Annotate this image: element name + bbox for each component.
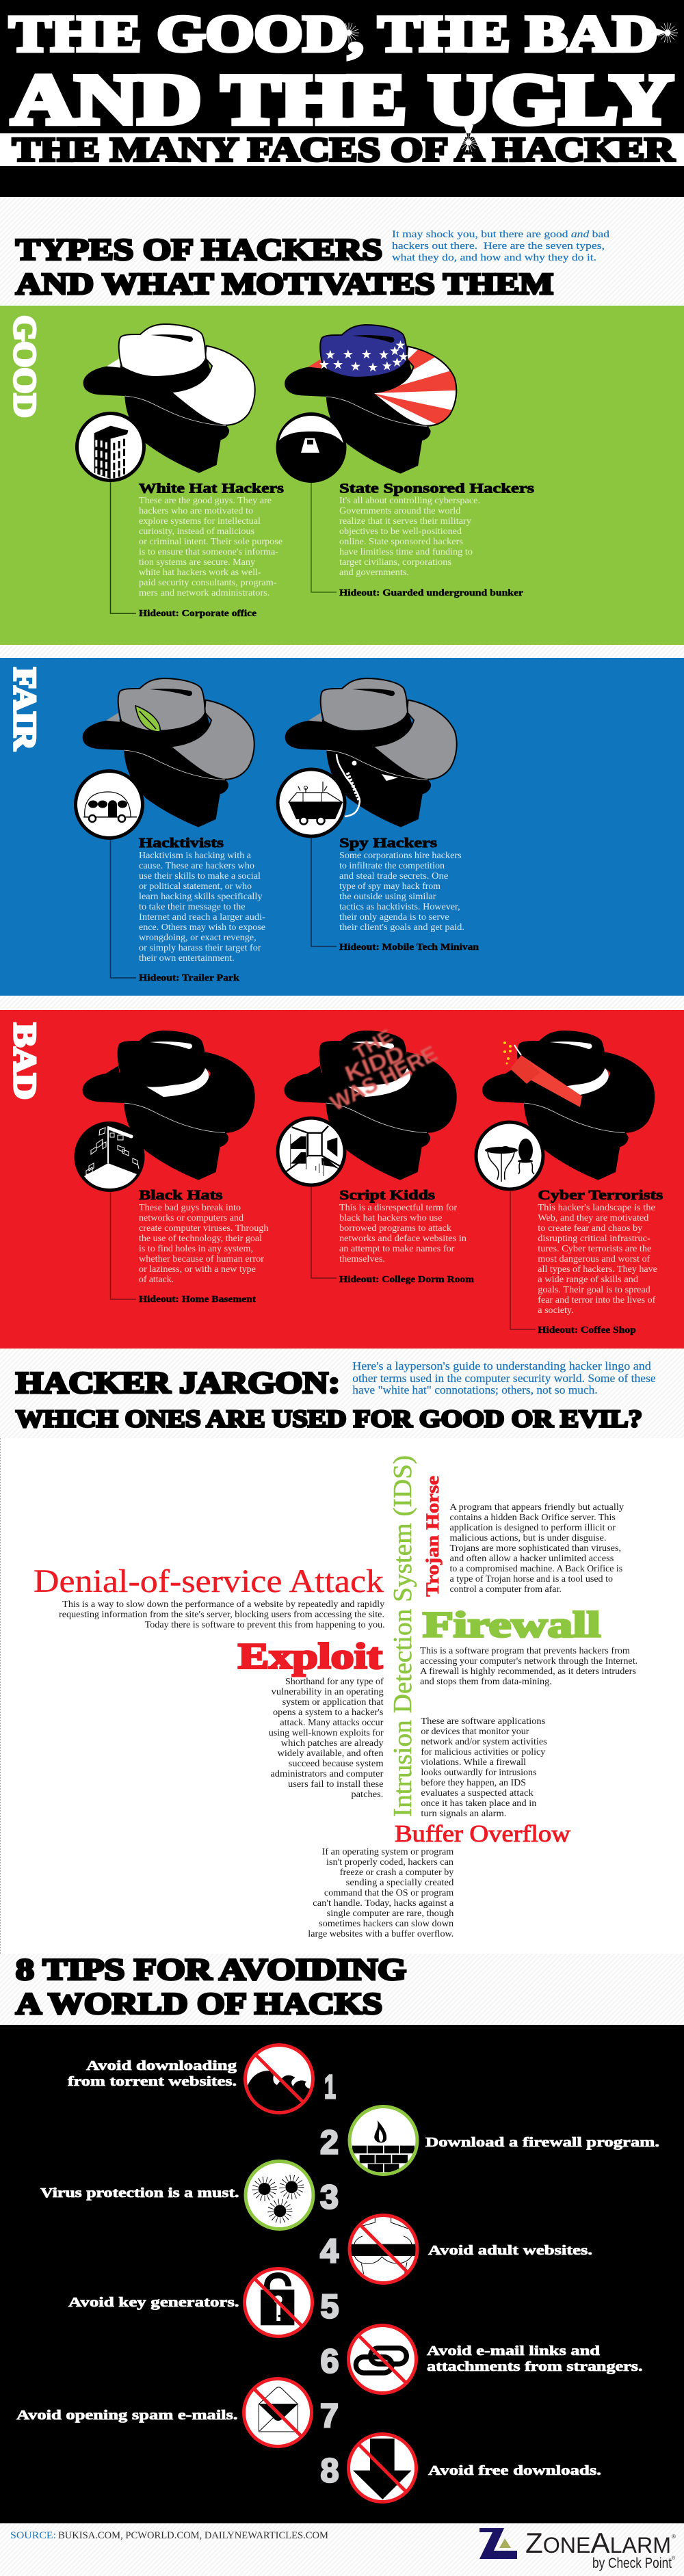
number 6: 6 <box>320 2343 339 2380</box>
section label fair: FAIR <box>7 667 42 751</box>
tip 1 <box>68 2045 336 2114</box>
spy text: to infiltrate the competition <box>339 861 445 871</box>
term: intrusion detection system: or devices that monitor your <box>421 1727 529 1737</box>
term: exploit: Exploit <box>238 1637 382 1677</box>
panel: footer <box>0 2523 684 2576</box>
state sponsored text: online. State sponsored hackers <box>339 537 463 547</box>
spy text: Hideout: Mobile Tech Minivan <box>339 942 479 952</box>
hacktivists text: Hacktivism is hacking with a <box>139 851 252 861</box>
term: denial of service: requesting information from the site's server, blocking users from accessing the site. <box>59 1610 384 1620</box>
tip 5 <box>68 2269 339 2336</box>
cyber terrorists text: Cyber Terrorists <box>538 1188 663 1203</box>
term: buffer overflow: can't handle. Today, hacks against a <box>313 1898 454 1909</box>
intro text: have "white hat" connotations; others, not so much. <box>352 1383 598 1396</box>
tip text <box>68 2058 237 2089</box>
term: trojan horse: Trojans are more sophisticated than viruses, <box>450 1543 621 1554</box>
tip 7 <box>16 2378 339 2447</box>
term: exploit: administrators and computer <box>270 1769 384 1779</box>
term: buffer overflow: isn't properly coded, hackers can <box>326 1857 453 1868</box>
term: intrusion detection system: violations. While a firewall <box>421 1757 526 1768</box>
sub heading: WHICH ONES ARE USED FOR GOOD OR EVIL? <box>16 1405 642 1432</box>
state sponsored text: Hideout: Guarded underground bunker <box>339 587 523 598</box>
tip 8 <box>320 2434 601 2501</box>
icon: college dorm room <box>278 1118 345 1185</box>
icon: no key generators <box>245 2269 312 2336</box>
panel: jargon terms <box>0 1438 637 1954</box>
cyber terrorists text: a wide range of skills and <box>538 1275 638 1285</box>
cyber terrorists text: a society. <box>538 1305 574 1316</box>
spy text: their only agenda is to serve <box>339 912 449 922</box>
hacktivists text: ence. Others may wish to expose <box>139 922 265 933</box>
term: exploit: users fail to install these <box>288 1779 384 1790</box>
term: exploit: using well-known exploits for <box>269 1728 384 1738</box>
icon: no adult sites <box>350 2216 417 2283</box>
state sponsored text: It's all about controlling cyberspace. <box>339 496 480 506</box>
black hats text: Hideout: Home Basement <box>139 1294 256 1304</box>
white hat text: tion systems are secure. Many <box>139 557 255 568</box>
term: exploit: vulnerability in an operating <box>272 1687 384 1697</box>
intro text: other terms used in the computer security world. Some of these <box>352 1372 656 1385</box>
spy text: Some corporations hire hackers <box>339 851 462 861</box>
tip 4 <box>320 2216 592 2283</box>
term: intrusion detection system: Intrusion Detection System (IDS) <box>389 1455 417 1817</box>
spy text: and steal trade secrets. One <box>339 871 448 881</box>
term: exploit: which patches are already <box>281 1738 384 1749</box>
term: firewall: and stops them from data-mining. <box>420 1677 552 1687</box>
graffiti: WAS HERE <box>326 1041 441 1115</box>
hacktivists text: their own entertainment. <box>139 953 235 964</box>
term: buffer overflow: If an operating system or program <box>322 1847 453 1857</box>
hacktivists text: Hideout: Trailer Park <box>139 972 239 983</box>
state sponsored text: realize that it serves their military <box>339 516 471 527</box>
term: buffer overflow: large websites with a buffer overflow. <box>308 1929 453 1939</box>
graffiti: THE <box>350 1025 396 1063</box>
term: exploit: patches. <box>351 1790 383 1800</box>
callout line spy <box>311 838 337 946</box>
bullet sparks <box>332 23 678 152</box>
script kidds text: Script Kidds <box>339 1188 435 1203</box>
white hat text: curiosity, instead of malicious <box>139 527 254 537</box>
icon: no torrents <box>245 2045 313 2114</box>
term: intrusion detection system: turn signals an alarm. <box>421 1809 506 1819</box>
tip text: Avoid adult websites. <box>428 2243 592 2258</box>
term: intrusion detection system: for malicious activities or policy <box>421 1747 545 1757</box>
term: buffer overflow: sometimes hackers can slow down <box>319 1919 453 1929</box>
state sponsored text: Governments around the world <box>339 506 460 516</box>
white hat text: is to ensure that someone's informa- <box>139 547 278 557</box>
number 3: 3 <box>320 2179 339 2216</box>
black hats text <box>139 1188 268 1304</box>
term: buffer overflow: command that the OS or program <box>324 1888 453 1898</box>
callout line hacktivists <box>111 840 136 978</box>
number 4: 4 <box>320 2233 339 2270</box>
icon: no spam <box>244 2378 312 2447</box>
spy text: their client's goals and get paid. <box>339 922 464 933</box>
term: intrusion detection system: These are software applications <box>421 1716 545 1727</box>
hacktivists text: Internet and reach a larger audi- <box>139 912 265 922</box>
term: trojan horse <box>423 1476 624 1597</box>
black hats text: create computer viruses. Through <box>139 1223 268 1234</box>
title line 1: THE GOOD, THE BAD <box>10 5 658 63</box>
term: trojan horse: a type of Trojan horse and is a tool used to <box>450 1574 613 1584</box>
icon: trailer <box>75 771 142 838</box>
state sponsored text: have limitless time and funding to <box>339 547 473 557</box>
heading line 2: AND WHAT MOTIVATES THEM <box>16 267 553 301</box>
script kidds text: black hat hackers who use <box>339 1213 442 1223</box>
term: firewall: This is a software program that prevents hackers from <box>420 1646 630 1656</box>
icon: viruses <box>246 2161 313 2229</box>
number 8: 8 <box>320 2452 339 2489</box>
cyber terrorists text: all types of hackers. They have <box>538 1264 657 1275</box>
term: trojan horse: and often allow a hacker unlimited access <box>450 1554 614 1564</box>
callout line black hats <box>111 1192 136 1299</box>
number 5: 5 <box>320 2288 339 2325</box>
cyber terrorists text: fear and terror into the lives of <box>538 1295 656 1305</box>
panel: fair <box>0 658 684 1010</box>
black hats text: Black Hats <box>139 1188 222 1203</box>
term: buffer overflow: sending a specially created <box>346 1878 453 1888</box>
white hat text: paid security consultants, program- <box>139 578 277 588</box>
tip text: attachments from strangers. <box>427 2359 643 2374</box>
term: exploit: opens a system to a hacker's <box>273 1708 383 1718</box>
state sponsored text: State Sponsored Hackers <box>339 481 534 496</box>
term: firewall: A firewall is highly recommended, as it deters intruders <box>420 1667 636 1677</box>
term: firewall: Firewall <box>423 1606 601 1645</box>
icon: minivan <box>278 769 345 836</box>
white hat text: white hat hackers work as well- <box>139 568 261 578</box>
heading: TYPES OF HACKERS <box>16 233 382 267</box>
term: trojan horse: Trojan Horse <box>423 1476 443 1597</box>
hacktivists text: cause. These are hackers who <box>139 861 254 871</box>
cyber terrorists text: Hideout: Coffee Shop <box>538 1325 636 1335</box>
panel: tips <box>0 2025 684 2523</box>
hacktivists text: or political statement, or who <box>139 881 252 892</box>
term: firewall <box>420 1606 637 1687</box>
term: trojan horse: contains a hidden Back Orifice server. This <box>450 1513 616 1523</box>
icon: firewall <box>350 2106 417 2175</box>
cyber terrorists text: most dangerous and worst of <box>538 1254 650 1264</box>
term: intrusion detection system: once it has taken place and in <box>421 1798 536 1809</box>
term: exploit: system or application that <box>282 1697 384 1708</box>
white hat text: Hideout: Corporate office <box>139 608 256 618</box>
tip text: from torrent websites. <box>68 2074 237 2089</box>
term: exploit: Shorthand for any type of <box>285 1677 384 1687</box>
term: exploit <box>238 1637 384 1800</box>
term: firewall: accessing your computer's network through the Internet. <box>420 1656 637 1667</box>
black hats text: or laziness, or with a new type <box>139 1264 256 1275</box>
intro text <box>352 1359 656 1396</box>
title banner <box>0 0 684 197</box>
cyber terrorists text: tures. Cyber terrorists are the <box>538 1244 651 1254</box>
icon: underground bunker <box>278 414 345 481</box>
source list: BUKISA.COM, PCWORLD.COM, DAILYNEWARTICLES.COM <box>58 2530 328 2541</box>
graffiti: KIDD <box>341 1040 408 1086</box>
term: exploit: attack. Many attacks occur <box>280 1718 384 1728</box>
panel: tips header <box>0 1952 684 2025</box>
white hat text: explore systems for intellectual <box>139 516 261 527</box>
callout line cyber terrorists <box>510 1191 536 1329</box>
icon: leaf <box>135 706 160 732</box>
tip 2 <box>320 2106 659 2175</box>
term: buffer overflow <box>308 1820 571 1939</box>
black hats text: These bad guys break into <box>139 1203 241 1213</box>
cyber terrorists text: disrupting critical infrastruc- <box>538 1234 650 1244</box>
tip text: Avoid e-mail links and <box>427 2343 601 2359</box>
hacktivist figure <box>83 678 254 827</box>
tip text: Avoid opening spam e-mails. <box>16 2408 238 2423</box>
tip text: Avoid free downloads. <box>428 2463 601 2478</box>
term: trojan horse: A program that appears friendly but actually <box>450 1502 624 1513</box>
tip text: Avoid downloading <box>86 2058 237 2073</box>
spy earpiece and teeth <box>337 754 398 816</box>
script kidds figure <box>285 1031 456 1180</box>
hacktivists text: wrongdoing, or exact revenge, <box>139 933 256 943</box>
white hat text: hackers who are motivated to <box>139 506 253 516</box>
spy text: tactics as hacktivists. However, <box>339 902 460 912</box>
tip text: Avoid key generators. <box>68 2295 239 2310</box>
term: denial of service: Today there is software to prevent this from happening to you. <box>145 1620 385 1630</box>
callout line script kidds <box>311 1186 337 1278</box>
state sponsored text: target civilians, corporations <box>339 557 451 568</box>
hacktivists text: or simply harass their target for <box>139 943 261 953</box>
black hats text: whether because of human error <box>139 1254 264 1264</box>
term: denial of service <box>34 1563 385 1630</box>
spy text: the outside using similar <box>339 892 436 902</box>
hacktivists text: to take their message to the <box>139 902 246 912</box>
tip text <box>427 2343 643 2374</box>
white hat text: mers and network administrators. <box>139 588 269 598</box>
state sponsored text <box>339 481 534 598</box>
cyber terrorist figure <box>482 1031 654 1180</box>
intro text: Here's a layperson's guide to understanding hacker lingo and <box>352 1359 652 1372</box>
script kidds text <box>339 1188 475 1284</box>
callout line state sponsored <box>311 482 337 592</box>
term: exploit: succeed because system <box>289 1759 384 1769</box>
black hats text: is to find holes in any system, <box>139 1244 253 1254</box>
tip 6 <box>320 2325 643 2393</box>
cyber terrorists text: Web, and they are motivated <box>538 1213 648 1223</box>
cyber terrorists text: This hacker's landscape is the <box>538 1203 655 1213</box>
icon: no email links <box>349 2325 416 2393</box>
term: intrusion detection system: looks outwardly for intrusions <box>421 1768 536 1778</box>
state sponsored text: and governments. <box>339 568 409 578</box>
white hat figure <box>83 324 255 473</box>
panel: good <box>0 284 684 658</box>
white hat text: White Hat Hackers <box>139 481 284 496</box>
cyber terrorists text: to create fear and chaos by <box>538 1223 642 1234</box>
script kidds text: borrowed programs to attack <box>339 1223 451 1234</box>
term: trojan horse: malicious actions, but is under disguise. <box>450 1533 606 1543</box>
heading: HACKER JARGON: <box>16 1365 340 1399</box>
script kidds text: networks and deface websites in <box>339 1234 466 1244</box>
term: intrusion detection system <box>389 1455 547 1819</box>
script kidds text: Hideout: College Dorm Room <box>339 1274 475 1284</box>
zonealarm logo: ZONEALARM <box>525 2527 671 2559</box>
icon: home basement <box>76 1123 143 1190</box>
panel: types intro <box>0 197 684 306</box>
black hat figure <box>83 1031 254 1180</box>
term: trojan horse: application is designed to perform illicit or <box>450 1523 616 1533</box>
term: buffer overflow: Buffer Overflow <box>395 1820 571 1847</box>
number 7: 7 <box>320 2398 339 2434</box>
term: trojan horse: control a computer from afar. <box>450 1584 562 1595</box>
icon: office building <box>77 413 144 480</box>
white hat text: These are the good guys. They are <box>139 496 272 506</box>
intro text <box>392 229 610 263</box>
panel: jargon header <box>0 1349 684 1438</box>
zonealarm logo <box>479 2527 676 2571</box>
spy text: Spy Hackers <box>339 836 437 851</box>
black hats text: the use of technology, their goal <box>139 1234 262 1244</box>
panel: bad <box>0 1010 684 1349</box>
title line 2: AND THE UGLY <box>12 60 673 139</box>
icon: coffee shop <box>476 1122 543 1189</box>
spy text: type of spy may hack from <box>339 881 440 892</box>
tip 3 <box>40 2161 339 2229</box>
white hat text: or criminal intent. Their sole purpose <box>139 537 282 547</box>
tip text: Virus protection is a must. <box>40 2186 239 2201</box>
subtitle: THE MANY FACES OF A HACKER <box>12 130 675 168</box>
state sponsored figure <box>285 324 457 474</box>
hacktivists text <box>139 836 265 983</box>
spy figure <box>285 678 457 827</box>
cyber terrorists text <box>538 1188 663 1335</box>
spy text <box>339 836 479 952</box>
white hat text <box>139 481 284 618</box>
black hats text: networks or computers and <box>139 1213 244 1223</box>
hacktivists text: Hacktivists <box>139 836 224 851</box>
zonealarm logo: ® <box>672 2534 676 2540</box>
intro text: It may shock you, but there are good and bad <box>392 229 610 240</box>
term: intrusion detection system: evaluates a suspected attack <box>421 1788 534 1798</box>
number 2: 2 <box>320 2124 339 2161</box>
term: exploit: widely available, and often <box>278 1749 384 1759</box>
heading line 1: 8 TIPS FOR AVOIDING <box>16 1952 406 1986</box>
tip text: Download a firewall program. <box>425 2135 659 2150</box>
zonealarm logo: ® <box>672 2555 676 2561</box>
intro text: hackers out there. Here are the seven types, <box>392 241 605 252</box>
term: trojan horse: to a compromised machine. A Back Orifice is <box>450 1564 622 1574</box>
intro text: what they do, and how and why they do it. <box>392 252 596 263</box>
term: intrusion detection system: before they happen, an IDS <box>421 1778 526 1788</box>
term: buffer overflow: freeze or crash a computer by <box>340 1868 453 1878</box>
term: denial of service: This is a way to slow down the performance of a website by repeatedly and rapidly <box>62 1599 384 1610</box>
hacktivists text: use their skills to make a social <box>139 871 261 881</box>
heading line 2: A WORLD OF HACKS <box>16 1986 382 2020</box>
term: buffer overflow: single computer are rare, though <box>327 1909 453 1919</box>
cyber terrorists text: goals. Their goal is to spread <box>538 1285 650 1295</box>
state sponsored text: objectives to be well-positioned <box>339 527 462 537</box>
black hats text: of attack. <box>139 1275 174 1285</box>
number 1: 1 <box>324 2069 336 2106</box>
icon: no free downloads <box>349 2434 416 2501</box>
term: denial of service: Denial-of-service Attack <box>34 1563 384 1599</box>
section label good: GOOD <box>7 315 42 418</box>
callout line white hat <box>111 482 136 613</box>
term: intrusion detection system: network and/or system activities <box>421 1737 547 1747</box>
script kidds text: an attempt to make names for <box>339 1244 455 1254</box>
icon: dynamite <box>503 1041 582 1107</box>
script kidds text: This is a disrespectful term for <box>339 1203 457 1213</box>
source label: SOURCE: <box>10 2530 56 2541</box>
script kidds text: themselves. <box>339 1254 385 1264</box>
hacktivists text: learn hacking skills specifically <box>139 892 263 902</box>
section label bad: BAD <box>7 1023 42 1100</box>
